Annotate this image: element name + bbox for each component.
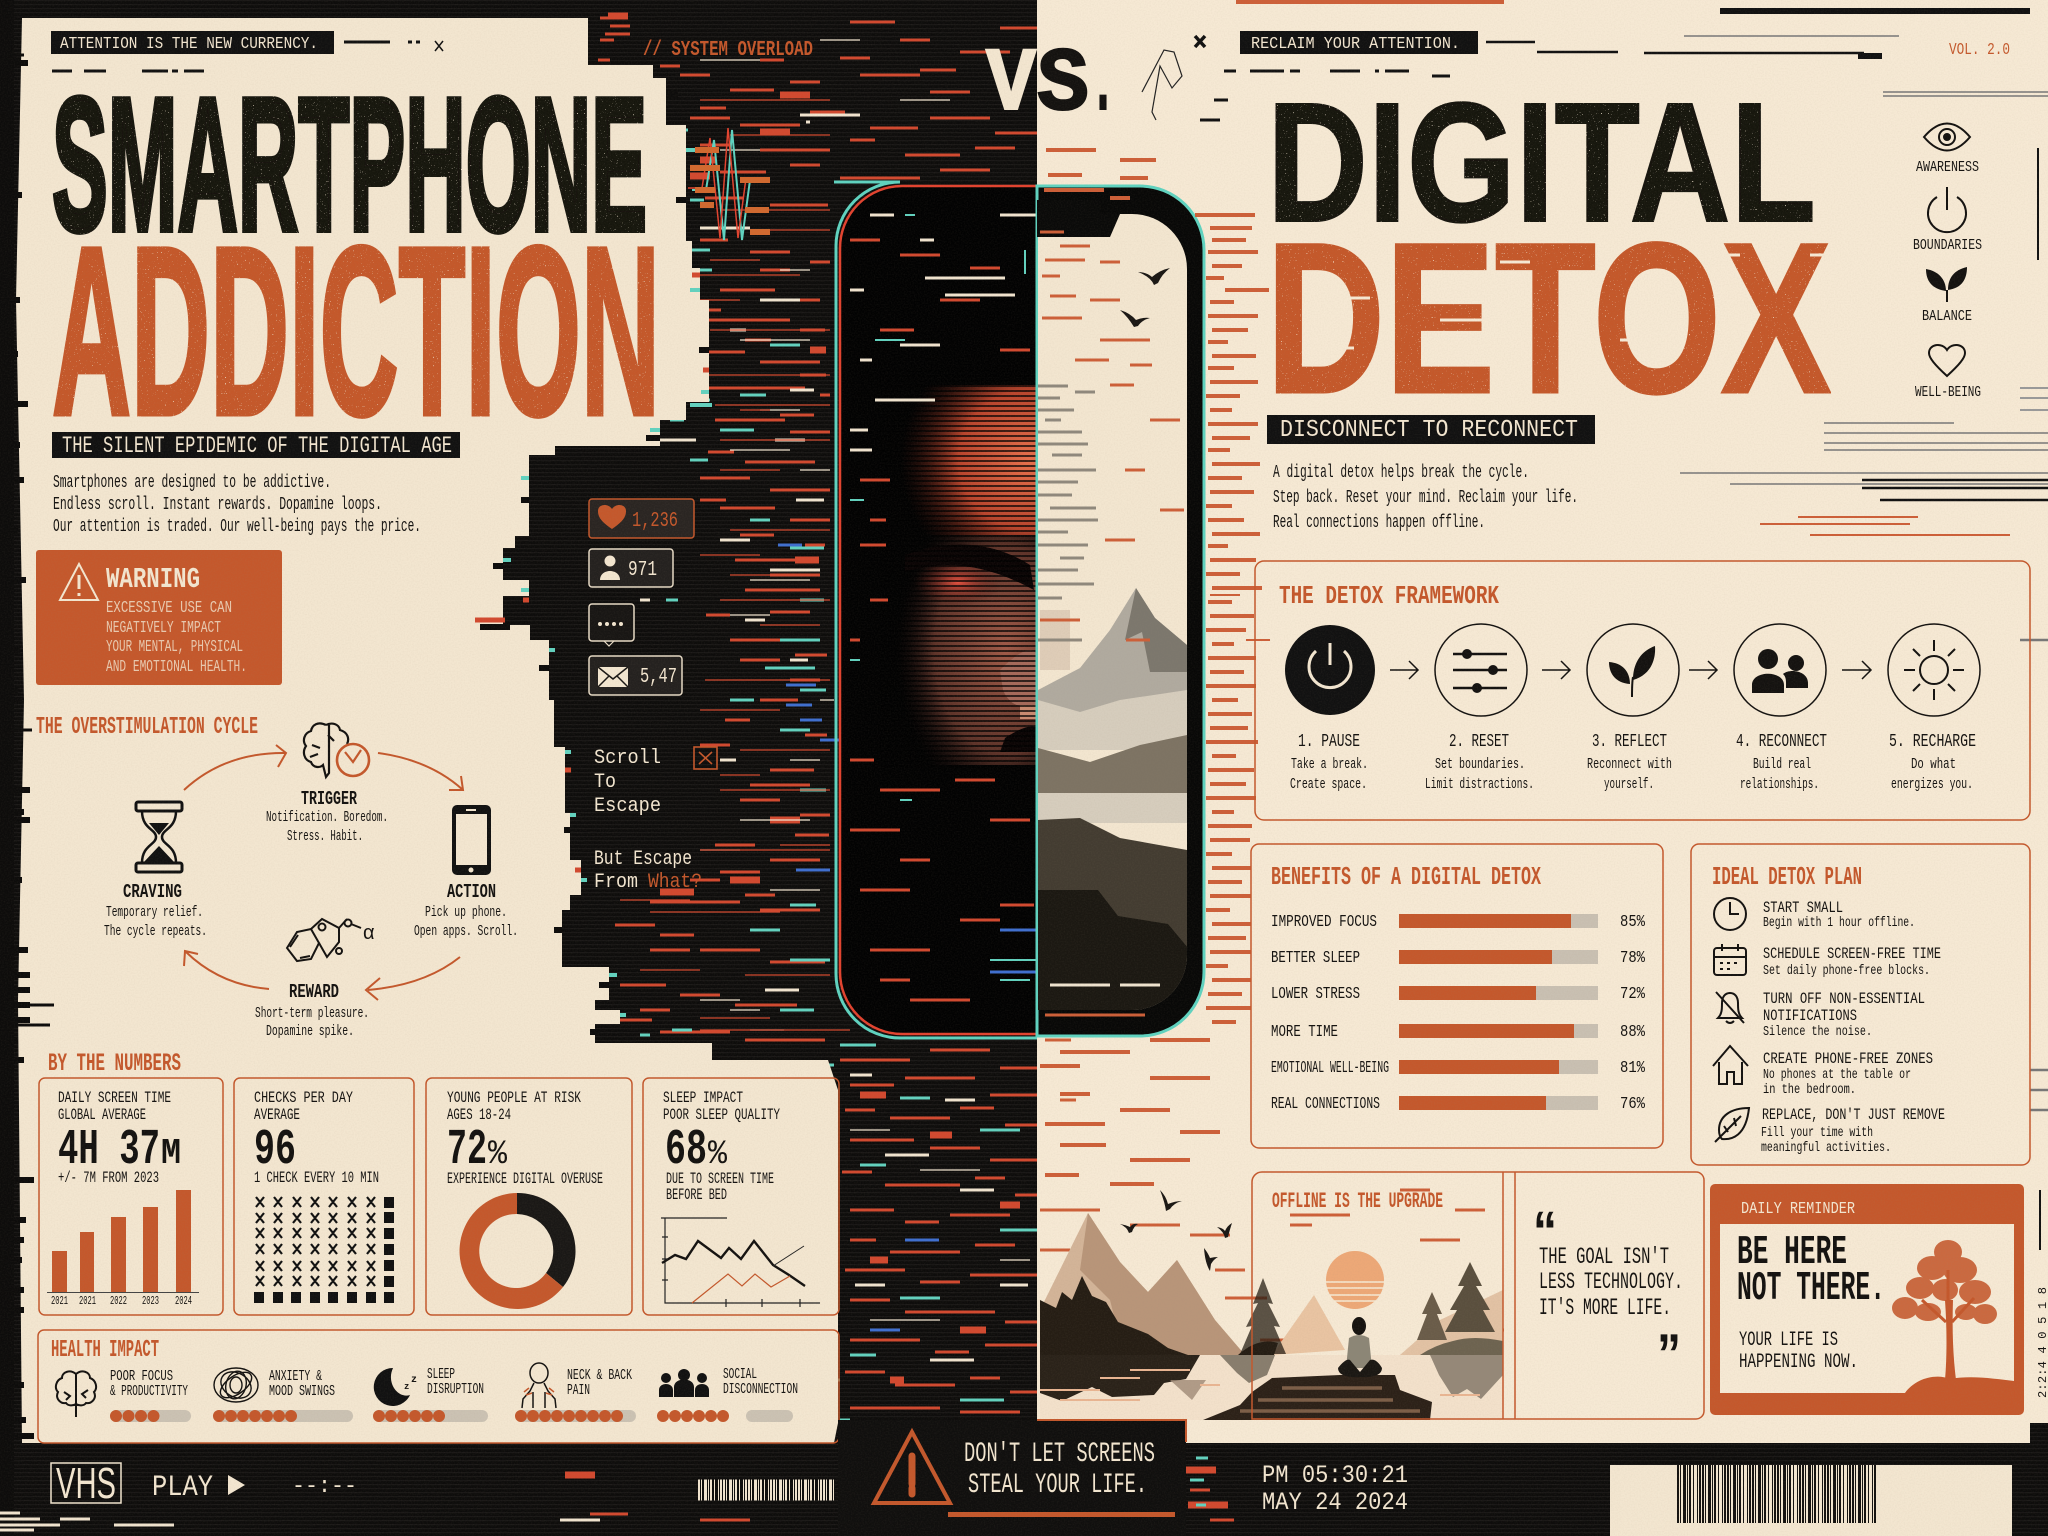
subtitle bar right: DISCONNECT TO RECONNECT bbox=[1280, 417, 1578, 444]
intro text: Endless scroll. Instant rewards. Dopamine loops. bbox=[53, 495, 382, 515]
footer timestamp bbox=[1262, 1461, 1408, 1517]
step 4: reconnect: Build real bbox=[1753, 756, 1811, 773]
plan item: zones: in the bedroom. bbox=[1763, 1082, 1856, 1098]
donut chart bbox=[460, 1193, 576, 1309]
text: . bbox=[1090, 35, 1116, 137]
left paper edge: black glitch blocks bbox=[0, 0, 54, 1536]
bar chart: benefits: MORE TIME bbox=[1271, 1023, 1338, 1042]
barcode label: footer right bbox=[1610, 1465, 2012, 1536]
bar chart: benefits: 72% bbox=[1620, 985, 1646, 1004]
panel: health impact bbox=[38, 1330, 839, 1443]
step 3: reflect: yourself. bbox=[1604, 776, 1654, 793]
plan item: zones bbox=[1713, 1046, 1933, 1098]
stat card: sleep impact: 68 bbox=[665, 1122, 707, 1179]
step 1: pause bbox=[1285, 625, 1375, 793]
label: volume: VOL. 2.0 bbox=[1949, 41, 2010, 60]
callout: don't let screens bbox=[838, 1420, 1186, 1536]
title: DIGITAL DETOX: DETOX bbox=[1266, 199, 1831, 438]
stat card: sleep impact: BEFORE BED bbox=[666, 1186, 727, 1204]
plan item: replace bbox=[1715, 1106, 1945, 1156]
stat card: checks per day: 1 CHECK EVERY 10 MIN bbox=[254, 1169, 379, 1187]
icon: warning triangle bbox=[60, 564, 98, 600]
quote: THE GOAL ISN'T bbox=[1539, 1244, 1669, 1270]
panel: detox framework bbox=[1255, 561, 2030, 820]
stat card: checks per day: AVERAGE bbox=[254, 1106, 300, 1124]
step 2: reset: Limit distractions. bbox=[1425, 776, 1534, 793]
bar chart: benefits: LOWER STRESS bbox=[1271, 985, 1360, 1004]
panel: ideal detox plan: IDEAL DETOX PLAN bbox=[1712, 862, 1862, 892]
footer bar: VHS bbox=[51, 1459, 357, 1508]
item: poor focus: & PRODUCTIVITY bbox=[110, 1383, 188, 1400]
scroll text: But Escape bbox=[594, 848, 692, 871]
intro text right: A digital detox helps break the cycle. bbox=[1273, 463, 1529, 483]
bar chart: 2022 bbox=[110, 1294, 127, 1308]
tag: reclaim: RECLAIM YOUR ATTENTION. bbox=[1251, 35, 1460, 54]
step: reward bbox=[255, 981, 369, 1040]
step: action: ACTION bbox=[447, 881, 496, 903]
scroll text: From bbox=[594, 871, 638, 894]
quote: ” bbox=[1657, 1322, 1681, 1385]
subtitle bar: THE SILENT EPIDEMIC OF THE DIGITAL AGE bbox=[62, 433, 452, 459]
intro text: Smartphones are designed to be addictive. bbox=[53, 473, 331, 493]
item: social disconnection: DISCONNECTION bbox=[723, 1381, 798, 1398]
bar chart: benefits: BETTER SLEEP bbox=[1271, 949, 1360, 968]
step 3: reflect bbox=[1587, 624, 1679, 793]
title: DIGITAL DETOX: DIGITAL bbox=[1267, 68, 1816, 258]
mountains bbox=[1040, 1213, 1503, 1355]
step 4: reconnect: 4. RECONNECT bbox=[1736, 732, 1827, 752]
item: neck and back pain: PAIN bbox=[567, 1382, 590, 1399]
cycle diagram bbox=[104, 723, 518, 1040]
step 3: reflect: 3. REFLECT bbox=[1592, 732, 1667, 752]
step 5: recharge: energizes you. bbox=[1891, 776, 1973, 793]
step: reward: Dopamine spike. bbox=[266, 1023, 354, 1040]
VS. label bbox=[986, 35, 1116, 137]
plan item: replace: Fill your time with bbox=[1761, 1125, 1873, 1141]
VS. label: V bbox=[986, 35, 1036, 137]
item: sleep disruption: z bbox=[404, 1382, 409, 1392]
notification: mail bbox=[589, 656, 682, 695]
stat card: sleep impact: % bbox=[708, 1136, 728, 1174]
step: action: Pick up phone. bbox=[425, 904, 507, 921]
text: ADDICTION bbox=[52, 197, 660, 465]
panel: daily reminder: BE HERE bbox=[1737, 1230, 1847, 1276]
step 1: pause: Create space. bbox=[1290, 776, 1367, 793]
bar chart: benefits bbox=[1271, 913, 1646, 1114]
stat card: young people bbox=[426, 1078, 632, 1315]
plan item: schedule: Set daily phone-free blocks. bbox=[1763, 963, 1930, 979]
side values: BOUNDARIES bbox=[1913, 237, 1982, 254]
step 4: reconnect bbox=[1734, 624, 1827, 793]
icon: hourglass bbox=[136, 802, 182, 872]
icon: well-being heart bbox=[1929, 345, 1965, 376]
panel: left paper sheet bbox=[16, 18, 838, 1443]
scroll text: Escape bbox=[594, 795, 661, 818]
item: sleep disruption bbox=[374, 1366, 484, 1416]
barcode: footer left bbox=[698, 1479, 835, 1500]
bar chart: benefits: REAL CONNECTIONS bbox=[1271, 1095, 1380, 1114]
plan item: start small bbox=[1714, 898, 1915, 931]
step 3: reflect: Reconnect with bbox=[1587, 756, 1672, 773]
bar chart: benefits: EMOTIONAL WELL-BEING bbox=[1271, 1059, 1389, 1078]
side values bbox=[1913, 124, 1982, 401]
item: anxiety bbox=[214, 1367, 347, 1416]
icon: dopamine molecule: α bbox=[363, 922, 375, 944]
stat card: checks per day bbox=[234, 1078, 414, 1315]
step: reward: Short-term pleasure. bbox=[255, 1005, 369, 1022]
scroll text: To bbox=[594, 771, 616, 794]
arrow bbox=[1842, 661, 1871, 679]
label: system overload: // SYSTEM OVERLOAD bbox=[643, 39, 813, 62]
bar chart: benefits: 76% bbox=[1620, 1095, 1646, 1114]
step: craving bbox=[104, 881, 207, 940]
item: anxiety: MOOD SWINGS bbox=[269, 1383, 335, 1400]
step 4: reconnect: relationships. bbox=[1740, 776, 1819, 793]
plan item: schedule: SCHEDULE SCREEN-FREE TIME bbox=[1763, 945, 1941, 963]
warning box: WARNING bbox=[106, 563, 200, 596]
phone notch bbox=[1037, 200, 1120, 237]
item: anxiety: ANXIETY & bbox=[269, 1368, 322, 1385]
step 1: pause: Take a break. bbox=[1291, 756, 1368, 773]
footer timestamp: MAY 24 2024 bbox=[1262, 1488, 1408, 1517]
glitch cuts across DETOX bbox=[1330, 255, 1830, 348]
rock bbox=[1203, 1375, 1432, 1420]
step: action bbox=[414, 881, 518, 940]
step 2: reset: 2. RESET bbox=[1449, 732, 1509, 752]
side values: AWARENESS bbox=[1916, 159, 1979, 176]
item: sleep disruption: DISRUPTION bbox=[427, 1381, 484, 1398]
bar chart: benefits: 85% bbox=[1620, 913, 1646, 932]
plan item: notifications: TURN OFF NON-ESSENTIAL bbox=[1763, 990, 1925, 1008]
notification: messages bbox=[589, 604, 634, 646]
step: craving: CRAVING bbox=[123, 881, 182, 903]
callout: don't let screens: STEAL YOUR LIFE. bbox=[968, 1470, 1147, 1501]
intro text: Our attention is traded. Our well-being pays the price. bbox=[53, 517, 421, 537]
stat card: sleep impact: POOR SLEEP QUALITY bbox=[663, 1106, 780, 1124]
footer glitch bbox=[0, 1513, 174, 1530]
left small marks bbox=[52, 41, 443, 71]
callout: don't let screens: DON'T LET SCREENS bbox=[964, 1439, 1155, 1470]
plan item: notifications: Silence the noise. bbox=[1763, 1024, 1872, 1040]
intro text right: Step back. Reset your mind. Reclaim your life. bbox=[1273, 488, 1578, 508]
decorative squiggle bbox=[1142, 50, 1182, 120]
portrait: glitched face bbox=[880, 370, 1038, 770]
panel: daily reminder: DAILY REMINDER bbox=[1741, 1200, 1855, 1219]
landscape scene bbox=[1040, 1213, 1505, 1420]
step: craving: Temporary relief. bbox=[106, 904, 203, 921]
tag: attention: ATTENTION IS THE NEW CURRENCY. bbox=[60, 35, 318, 54]
panel: daily reminder bbox=[1710, 1184, 2024, 1415]
panel: daily reminder: HAPPENING NOW. bbox=[1739, 1351, 1858, 1374]
notification: likes bbox=[589, 499, 694, 538]
notification: followers bbox=[589, 549, 673, 587]
notification: mail: 5,47 bbox=[640, 666, 677, 689]
VHS grey lines and top marks on right bbox=[1200, 11, 2048, 1250]
step 5: recharge bbox=[1888, 624, 1980, 793]
bar chart: 2021 bbox=[79, 1294, 96, 1308]
pictogram grid bbox=[254, 1197, 394, 1303]
panel: health impact: HEALTH IMPACT bbox=[51, 1337, 159, 1364]
icon: warning triangle bbox=[874, 1432, 950, 1503]
item: social disconnection bbox=[659, 1366, 798, 1416]
plan item: notifications: NOTIFICATIONS bbox=[1763, 1007, 1857, 1025]
icon: X mark top right bbox=[1195, 36, 1205, 47]
arrow bbox=[1542, 661, 1570, 679]
icon: birds in phone bbox=[1120, 268, 1170, 327]
plan item: zones: CREATE PHONE-FREE ZONES bbox=[1763, 1050, 1933, 1068]
notification: likes: 1,236 bbox=[632, 510, 678, 533]
warning box: NEGATIVELY IMPACT bbox=[106, 619, 221, 638]
footer bar: VHS: VHS bbox=[56, 1459, 116, 1508]
step 1: pause: 1. PAUSE bbox=[1298, 732, 1360, 752]
stat card: sleep impact bbox=[643, 1078, 839, 1315]
bar chart: benefits: 78% bbox=[1620, 949, 1646, 968]
plan item: replace: REPLACE, DON'T JUST REMOVE bbox=[1762, 1106, 1945, 1124]
bar chart: benefits: IMPROVED FOCUS bbox=[1271, 913, 1377, 932]
plan item: start small: START SMALL bbox=[1763, 899, 1843, 917]
bar chart bbox=[47, 1190, 199, 1308]
intro text right bbox=[1273, 463, 1578, 533]
panel: right paper sheet bbox=[1037, 0, 2048, 1443]
heading: by the numbers: BY THE NUMBERS bbox=[48, 1049, 181, 1078]
plan item: replace: meaningful activities. bbox=[1761, 1140, 1891, 1156]
panel: ideal detox plan bbox=[1691, 844, 2030, 1165]
item: neck and back pain: NECK & BACK bbox=[567, 1367, 632, 1384]
item: neck and back pain bbox=[521, 1363, 632, 1416]
step 5: recharge: Do what bbox=[1911, 756, 1956, 773]
icon: tree bbox=[1892, 1240, 2014, 1393]
glitch streaks over dark zone bbox=[560, 16, 1234, 1520]
arrows bbox=[184, 745, 463, 1000]
stat card: young people: AGES 18-24 bbox=[447, 1106, 511, 1124]
icon: dopamine molecule bbox=[287, 919, 375, 961]
icon: brain and clock bbox=[304, 723, 369, 777]
phone: dark left half with glitch screen bbox=[834, 182, 1038, 1038]
arrow bbox=[1390, 661, 1418, 679]
panel: detox framework: THE DETOX FRAMEWORK bbox=[1279, 581, 1499, 611]
scroll text bbox=[594, 747, 717, 894]
bar chart: 2023 bbox=[142, 1294, 159, 1308]
bar chart: 2021 bbox=[51, 1294, 68, 1308]
stat card: young people: EXPERIENCE DIGITAL OVERUSE bbox=[447, 1170, 603, 1188]
heartbeat glitch bbox=[688, 128, 770, 240]
plan item: notifications bbox=[1716, 990, 1925, 1040]
plan item: schedule bbox=[1714, 944, 1941, 979]
stat card: sleep impact: SLEEP IMPACT bbox=[663, 1089, 743, 1107]
step: trigger bbox=[266, 788, 388, 845]
icon: close box bbox=[694, 747, 717, 769]
intro text right: Real connections happen offline. bbox=[1273, 513, 1485, 533]
stat card: daily screen time: M bbox=[161, 1133, 181, 1174]
step: trigger: TRIGGER bbox=[301, 788, 357, 810]
heading: cycle: THE OVERSTIMULATION CYCLE bbox=[36, 714, 258, 741]
birds over landscape bbox=[1120, 1190, 1232, 1271]
phone: right half frame and screen bbox=[1037, 186, 1204, 1036]
side values: BALANCE bbox=[1922, 308, 1972, 325]
line chart bbox=[661, 1218, 820, 1307]
quote: LESS TECHNOLOGY. bbox=[1539, 1269, 1683, 1295]
footer bar: VHS: PLAY bbox=[152, 1471, 213, 1505]
offline panel frame bbox=[1252, 1172, 1704, 1419]
bar chart: benefits: 81% bbox=[1620, 1059, 1646, 1078]
title: DIGITAL DETOX bbox=[1266, 68, 1831, 438]
quote bbox=[1533, 1199, 1683, 1385]
water and reflections bbox=[1040, 1355, 1505, 1420]
text: SMARTPHONE bbox=[52, 59, 647, 271]
icon: phone bbox=[452, 805, 491, 875]
step 5: recharge: 5. RECHARGE bbox=[1889, 732, 1976, 752]
stat card: daily screen time: 4H 37 bbox=[58, 1122, 160, 1179]
notification: followers: 971 bbox=[628, 559, 657, 582]
warning box: EXCESSIVE USE CAN bbox=[106, 599, 232, 618]
intro text bbox=[53, 473, 421, 537]
panel: benefits: BENEFITS OF A DIGITAL DETOX bbox=[1271, 862, 1541, 892]
item: poor focus bbox=[56, 1368, 188, 1417]
meditating figure bbox=[1338, 1317, 1382, 1377]
warning box: YOUR MENTAL, PHYSICAL bbox=[106, 638, 243, 657]
footer timestamp: PM 05:30:21 bbox=[1262, 1461, 1408, 1490]
edge glitch blocks bbox=[475, 95, 712, 1032]
panel: daily reminder: YOUR LIFE IS bbox=[1739, 1329, 1838, 1352]
stat card: checks per day: CHECKS PER DAY bbox=[254, 1089, 353, 1107]
stat card: daily screen time bbox=[39, 1078, 223, 1315]
warning box: AND EMOTIONAL HEALTH. bbox=[106, 658, 247, 677]
arrow bbox=[1689, 661, 1717, 679]
scroll text: What? bbox=[648, 871, 702, 894]
side values: WELL-BEING bbox=[1915, 384, 1981, 401]
bar chart: 2024 bbox=[175, 1294, 192, 1308]
stat card: daily screen time: +/- 7M FROM 2023 bbox=[58, 1169, 159, 1187]
plan item: start small: Begin with 1 hour offline. bbox=[1763, 915, 1915, 931]
item: sleep disruption: z bbox=[411, 1375, 417, 1386]
step: action: Open apps. Scroll. bbox=[414, 923, 518, 940]
stat card: young people: 72 bbox=[447, 1122, 487, 1179]
stat card: checks per day: 96 bbox=[254, 1122, 296, 1179]
warning box bbox=[36, 550, 282, 685]
stat card: daily screen time: GLOBAL AVERAGE bbox=[58, 1106, 146, 1124]
VS. label: S bbox=[1037, 35, 1089, 137]
glitch dashes on right paper bbox=[1040, 2, 2010, 1340]
bar chart: benefits: 88% bbox=[1620, 1023, 1646, 1042]
panel: benefits bbox=[1251, 844, 1663, 1148]
quote: “ bbox=[1533, 1199, 1557, 1262]
footer bar: VHS: --:-- bbox=[292, 1474, 357, 1499]
item: poor focus: POOR FOCUS bbox=[110, 1368, 173, 1385]
quote: IT'S MORE LIFE. bbox=[1539, 1295, 1671, 1321]
stat card: daily screen time: DAILY SCREEN TIME bbox=[58, 1089, 171, 1107]
icon: awareness eye bbox=[1924, 124, 1970, 150]
phone screen: mountain scene bbox=[1038, 588, 1188, 1020]
icon: boundaries power bbox=[1928, 187, 1966, 232]
title: SMARTPHONE ADDICTION bbox=[52, 59, 660, 465]
scroll text: Scroll bbox=[594, 747, 661, 770]
step 2: reset: Set boundaries. bbox=[1435, 756, 1525, 773]
sun bbox=[1325, 1251, 1385, 1309]
stat card: young people: % bbox=[488, 1136, 508, 1174]
item: sleep disruption: SLEEP bbox=[427, 1366, 455, 1383]
step 2: reset bbox=[1425, 624, 1534, 793]
step: trigger: Stress. Habit. bbox=[287, 828, 363, 845]
icon: balance leaf bbox=[1926, 267, 1967, 302]
step: craving: The cycle repeats. bbox=[104, 923, 207, 940]
step: reward: REWARD bbox=[289, 981, 339, 1003]
stat card: young people: YOUNG PEOPLE AT RISK bbox=[447, 1089, 581, 1107]
panel: daily reminder: NOT THERE. bbox=[1737, 1266, 1885, 1312]
trees bbox=[1040, 1262, 1503, 1355]
offline panel frame: OFFLINE IS THE UPGRADE bbox=[1272, 1189, 1443, 1214]
step: trigger: Notification. Boredom. bbox=[266, 809, 388, 826]
plan item: zones: No phones at the table or bbox=[1763, 1067, 1911, 1083]
item: social disconnection: SOCIAL bbox=[723, 1366, 757, 1383]
stat card: sleep impact: DUE TO SCREEN TIME bbox=[666, 1170, 774, 1188]
